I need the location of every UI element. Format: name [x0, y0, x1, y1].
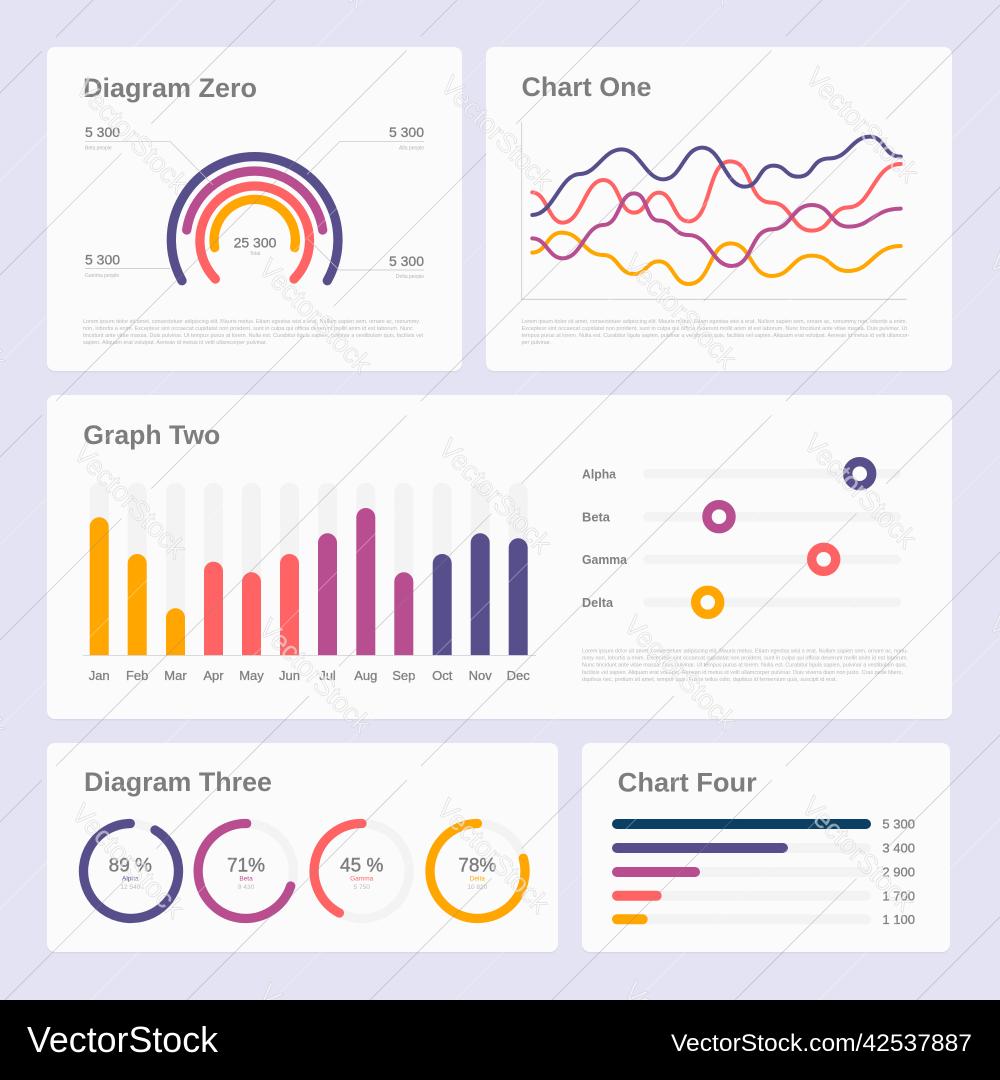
text block: Lorem ipsum dolor sit amet, consectetuer adipiscing elit. Mauris metus. Etiam egestas wisi a erat. Nullam sapien sem, ornare ac, nonummy non, lobortis a enim. [522, 319, 907, 325]
watermark overlay: VectorStock [800, 61, 925, 188]
bar chart: Mar [164, 668, 187, 683]
panel: Diagram Three [47, 743, 558, 954]
panel: Diagram Zero [47, 47, 462, 372]
bar chart: Aug [354, 668, 377, 683]
heading: Chart Four: Chart Four [618, 768, 757, 798]
bar: 3 400 [612, 841, 915, 856]
text block [83, 319, 423, 346]
bar chart: Jan [89, 668, 110, 683]
label: Delta people: 5 300 [389, 253, 424, 269]
text block: per pulvinar. [522, 340, 551, 346]
bar chart: Jun [279, 668, 300, 683]
bar: 5 300: 5 300 [882, 817, 915, 832]
bar chart: Jul [319, 668, 336, 683]
donut: Alpha 89%: Alpha [122, 876, 139, 883]
bar: 1 700: 1 700 [882, 888, 915, 903]
panel: Chart Four [582, 743, 950, 954]
bar: 1 100 [612, 912, 915, 927]
label: Beta people: 5 300 [85, 124, 120, 140]
donut: Delta 78%: 10 820 [467, 884, 488, 891]
text block [522, 319, 910, 346]
bar: 2 900: 2 900 [882, 864, 915, 880]
bar: 1 700 [612, 888, 915, 903]
watermark overlay: VectorStock [253, 252, 378, 379]
watermark overlay: VectorStock [431, 792, 556, 919]
donut: Alpha 89% [83, 824, 179, 918]
watermark overlay: VectorStock [70, 72, 195, 199]
bar chart: Oct [432, 668, 453, 683]
bar chart: May [239, 668, 264, 683]
text block: Lorem ipsum dolor sit amet, consectetuer adipiscing elit. Mauris metus. Etiam egestas wisi a erat. Nullam sapien sem, ornare ac, nonu- [582, 648, 908, 654]
donut: Delta 78%: Delta [470, 876, 485, 883]
watermark overlay: VectorStock [435, 69, 560, 196]
label: Gamma people: 5 300 [85, 252, 120, 268]
donut: Alpha 89%: 12 540 [120, 884, 141, 891]
label: Beta people [85, 124, 120, 152]
donut: Gamma 45%: 5 750 [354, 884, 370, 891]
label: Alfa people: Alfa people [399, 146, 424, 152]
gauge chart: concentric arcs [171, 157, 338, 281]
slider: Delta: Delta [582, 595, 614, 610]
slider: Delta [582, 590, 901, 614]
gauge total: 25 300 [234, 234, 277, 250]
text block: tincidunt ante vitae massa. Duis pulvinar. Ut tempus purus at lorem. Nulla est. Curabitur ligula sapien, pulvinar a vestibulum quis, facilisis vel [83, 333, 423, 339]
watermark overlay: VectorStock [68, 437, 193, 564]
heading: Diagram Three: Diagram Three [84, 767, 272, 797]
watermark overlay: VectorStock [433, 432, 558, 559]
slider: Alpha: Alpha [582, 466, 617, 481]
donut: Beta 71% [198, 823, 294, 918]
bar chart: Feb [126, 668, 148, 683]
label: Alfa people: 5 300 [389, 124, 424, 140]
footer url: VectorStock.com/42537887 [671, 1030, 972, 1057]
gauge total: Total [250, 251, 260, 257]
bar chart [83, 483, 536, 683]
slider: Gamma: Gamma [582, 552, 628, 567]
slider: Beta: Beta [582, 509, 611, 524]
donut: Beta 71%: 9 430 [238, 884, 255, 891]
watermark overlay: VectorStock [253, 612, 378, 739]
bar chart: Nov [469, 668, 492, 683]
label: Gamma people [85, 252, 120, 279]
text block: Nunc tincidunt ante vitae massa. Duis pulvinar. Ut tempus purus at lorem. Nulla est. Curabitur ligula sapien, pulvinar a vestibulum quis, [582, 663, 907, 669]
footer brand: VectorStock [27, 1019, 219, 1060]
text block: facilisis vel sapien. Aliquam erat volutpat. Aenean id metus id velit ullamcorper pulvinar. Duis viverra diam non justo. Cras pede libero, [582, 670, 903, 676]
footer bar [0, 1000, 1000, 1080]
bar: 3 400: 3 400 [882, 841, 915, 856]
donut: Gamma 45% [314, 823, 409, 918]
bar: 5 300 [612, 817, 915, 832]
donut: Beta 71%: Beta [239, 876, 253, 883]
heading: Graph Two: Graph Two [83, 420, 220, 450]
slider: Beta [582, 505, 901, 529]
bar chart: Apr [203, 668, 224, 683]
donut: Gamma 45%: 45 % [340, 856, 383, 877]
watermark overlay: VectorStock [66, 797, 191, 924]
label: Delta people: Delta people [396, 274, 424, 280]
text block: tempus purus at lorem. Nulla est. Curabitur ligula sapien, pulvinar a vestibulum quis, facilisis vel sapien. Aliquam erat volutpat. Aenean id metus id velit ullamcor- [522, 333, 910, 339]
watermark overlay: VectorStock [798, 427, 923, 554]
bar: 2 900 [612, 864, 915, 880]
slider: Alpha [582, 462, 901, 486]
heading: Chart One: Chart One [522, 72, 652, 102]
label: Alfa people [389, 124, 424, 152]
text block: dapibus nec, pretium sit amet, tempor quis. Fusce tellus odio, dapibus id fermentum quis, suscipit id erat. [582, 677, 837, 683]
text block: Lorem ipsum dolor sit amet, consectetuer adipiscing elit. Mauris metus. Etiam egestas wisi a erat. Nullam sapien sem, ornare ac, nonummy [83, 319, 419, 325]
donut: Delta 78%: 78% [458, 856, 496, 877]
donut: Delta 78% [430, 824, 525, 919]
text block: Excepteur sint occaecat cupidatat non proident, sunt in culpa qui officia deserunt mollit anim id est laborum. Nunc tincidunt ante vitae massa. Duis pulvinar. Ut [522, 326, 908, 332]
bar chart: Sep [392, 668, 415, 683]
watermark overlay: VectorStock [618, 609, 743, 736]
panel: Chart One [486, 47, 952, 372]
watermark overlay: VectorStock [618, 247, 743, 374]
watermark overlay: VectorStock [796, 790, 921, 917]
text block: sapien. Aliquam erat volutpat. Aenean id metus id velit ullamcorper pulvinar. [83, 340, 267, 346]
bar chart: Dec [507, 668, 530, 683]
bar: 1 100: 1 100 [882, 912, 915, 927]
heading: Diagram Zero: Diagram Zero [83, 73, 257, 103]
donut: Alpha 89%: 89 % [109, 856, 152, 877]
label: Gamma people: Gamma people [85, 273, 119, 279]
text block: non, lobortis a enim. Excepteur sint occaecat cupidatat non proident, sunt in culpa qui officia deserunt mollit anim id est laborum. Nunc [83, 326, 413, 332]
text block: mmy non, lobortis a enim. Excepteur sint occaecat cupidatat non proident, sunt in culpa qui officia deserunt mollit anim id est laborum. [582, 656, 908, 662]
leader lines [85, 141, 424, 270]
panel: Graph Two [47, 395, 952, 720]
line chart [522, 122, 907, 299]
donut: Gamma 45%: Gamma [350, 876, 374, 883]
donut: Beta 71%: 71% [227, 856, 265, 877]
slider: Gamma [582, 547, 901, 571]
label: Delta people [389, 253, 424, 280]
label: Beta people: Beta people [85, 146, 112, 152]
text block [582, 648, 908, 683]
